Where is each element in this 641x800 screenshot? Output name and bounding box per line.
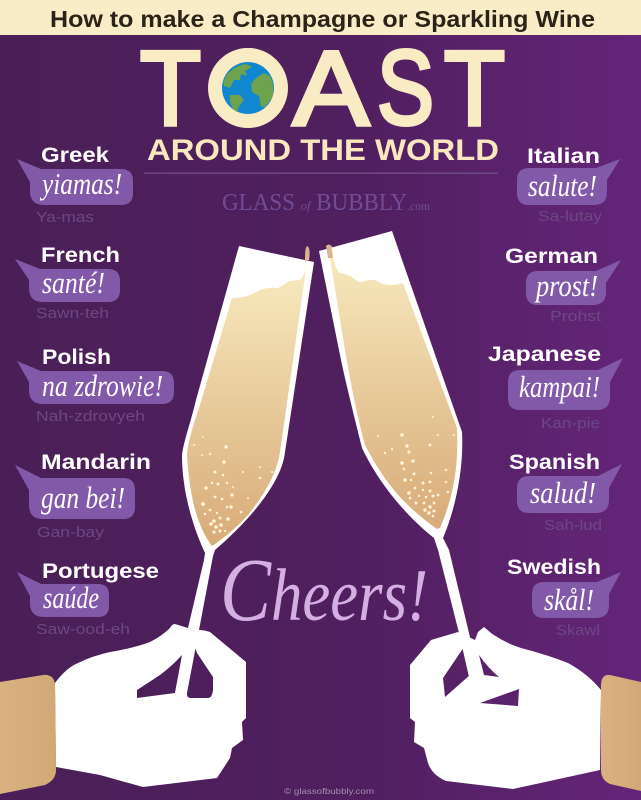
- left toast: Portugese: Portugese: [42, 560, 159, 583]
- right sleeve: [601, 675, 641, 791]
- title: TOAST: T: [444, 30, 505, 148]
- subtitle: AROUND THE WORLD: [147, 134, 499, 167]
- title: TOAST: A: [293, 30, 369, 148]
- left toast: French: French: [41, 244, 120, 267]
- left toast: Polish: Nah-zdrovyeh: [36, 409, 145, 425]
- title: TOAST: T: [140, 30, 201, 148]
- left toast: Greek: yiamas!: [40, 166, 122, 201]
- left toast: Greek: Greek: [41, 144, 109, 167]
- right toast: Italian: Italian: [527, 145, 600, 168]
- right toast: German: [505, 245, 621, 325]
- left toast: Greek: [17, 144, 133, 226]
- right toast: Italian: salute!: [528, 168, 597, 203]
- header banner: [0, 0, 641, 35]
- copyright footer: © glassofbubbly.com: [284, 786, 374, 796]
- right toast: Italian: [517, 145, 620, 225]
- left champagne glass: [175, 246, 314, 693]
- left toast: French: santé!: [42, 265, 105, 300]
- left toast: Mandarin: [15, 451, 151, 541]
- left toast: French: [15, 244, 120, 322]
- right toast: Spanish: salud!: [530, 475, 596, 510]
- left toast: Portugese: [17, 560, 159, 638]
- title: TOAST: S: [377, 29, 434, 147]
- left toast: Portugese: Saw-ood-eh: [36, 622, 130, 638]
- header banner: How to make a Champagne or Sparkling Wine: [50, 6, 595, 32]
- left toast: Mandarin: gan bei!: [41, 480, 125, 515]
- right toast: Swedish: [507, 556, 621, 639]
- right toast: Japanese: Japanese: [488, 343, 601, 366]
- right toast: Spanish: Spanish: [509, 451, 600, 474]
- right toast: Japanese: [488, 343, 623, 432]
- left toast: Mandarin: Gan-bay: [37, 525, 105, 541]
- cheers script: Cheers!: [220, 541, 428, 640]
- left toast: Greek: Ya-mas: [36, 210, 94, 226]
- right toast: German: prost!: [534, 268, 598, 303]
- right toast: Spanish: [509, 451, 622, 534]
- left toast: Polish: [17, 346, 174, 425]
- right champagne glass: [319, 231, 479, 677]
- left toast: French: Sawn-teh: [36, 306, 109, 322]
- icon: globe: [222, 62, 274, 114]
- right toast: Spanish: Sah-lud: [544, 518, 602, 534]
- right toast: Italian: Sa-lutay: [538, 209, 603, 225]
- right toast: Japanese: Kan-pie: [541, 416, 600, 432]
- left sleeve: [0, 675, 56, 794]
- right toast: Japanese: kampai!: [519, 369, 600, 404]
- title: TOAST: O: [213, 29, 283, 147]
- right toast: Swedish: skål!: [544, 582, 594, 617]
- left toast: Portugese: saúde: [43, 580, 99, 615]
- right toast: German: German: [505, 245, 598, 268]
- right hand: [410, 627, 601, 789]
- right toast: Swedish: Swedish: [507, 556, 601, 579]
- right toast: German: Prohst: [550, 309, 601, 325]
- title: TOAST: [140, 29, 505, 148]
- left toast: Mandarin: Mandarin: [41, 451, 151, 474]
- right toast: Swedish: Skawl: [556, 623, 600, 639]
- brand logo text: GLASS of BUBBLY.com: [222, 190, 431, 216]
- left toast: Polish: Polish: [42, 346, 111, 369]
- left toast: Polish: na zdrowie!: [42, 368, 163, 403]
- left hand: [55, 624, 246, 787]
